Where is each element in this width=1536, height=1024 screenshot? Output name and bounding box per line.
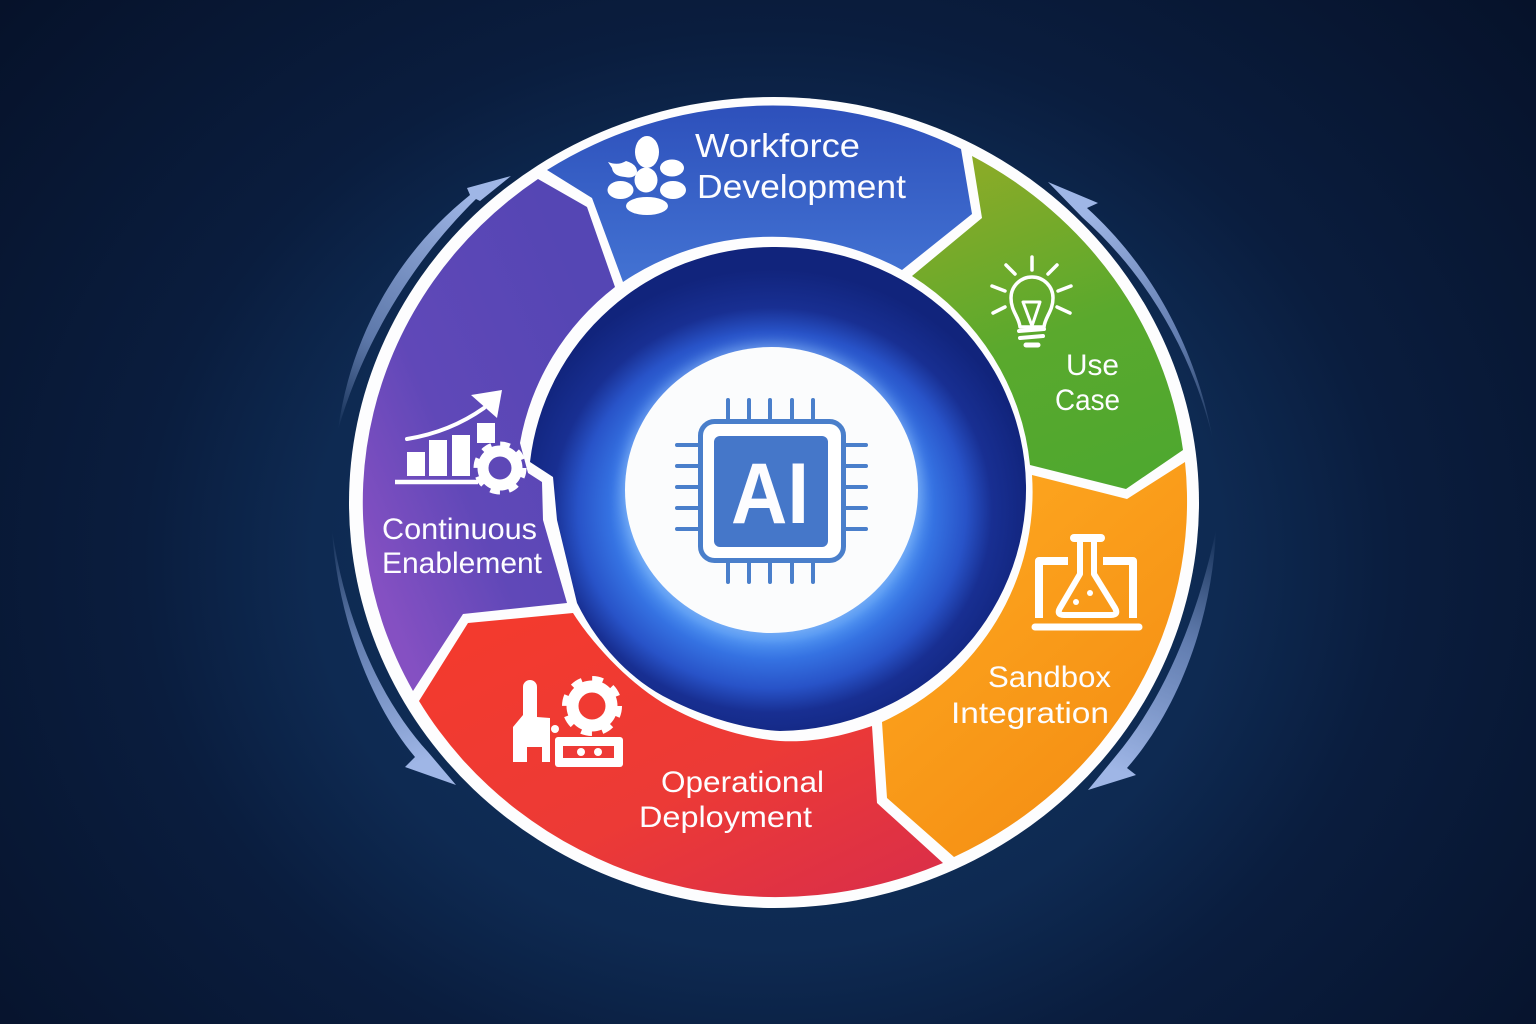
label: Operational Deployment (639, 766, 824, 834)
label: Workforce Development: Workforce (695, 127, 860, 164)
label: Workforce Development (695, 127, 906, 205)
outer white ring (349, 97, 1199, 908)
icon: people group (608, 136, 686, 215)
label: Use Case: Use (1066, 349, 1119, 382)
label: Continuous Enablement: Continuous (382, 513, 537, 546)
center white circle (625, 347, 918, 633)
label: Use Case: Case (1055, 384, 1120, 417)
icon: flask on laptop (1035, 538, 1139, 627)
panel: Workforce Development (547, 106, 972, 282)
arrow: cycle top left (338, 176, 511, 430)
arrow: cycle top right (1048, 182, 1213, 440)
label: Sandbox Integration: Sandbox (988, 661, 1111, 694)
panel: Continuous Enablement (363, 179, 615, 691)
label: Operational Deployment: Deployment (639, 801, 813, 834)
label: AI: AI (731, 446, 809, 542)
label: Sandbox Integration (951, 661, 1111, 730)
icon: growth chart and gear (395, 390, 522, 490)
label: Sandbox Integration: Integration (951, 697, 1109, 730)
arrow: cycle bottom left (332, 530, 456, 785)
panel: Sandbox Integration (882, 462, 1187, 857)
panel: Use Case (912, 156, 1183, 489)
icon: AI chip (677, 400, 866, 582)
label: Workforce Development: Development (697, 168, 906, 205)
label: Continuous Enablement (382, 513, 543, 580)
label: Continuous Enablement: Enablement (382, 547, 543, 580)
center glow (622, 344, 920, 636)
arrow: cycle bottom right (1088, 530, 1216, 790)
inner blue disc (530, 247, 1026, 731)
panel: Operational Deployment (419, 613, 943, 897)
icon: factory and gear (513, 680, 623, 767)
label: Use Case (1055, 349, 1120, 417)
label: Operational Deployment: Operational (661, 766, 824, 799)
icon: light bulb (992, 257, 1071, 345)
